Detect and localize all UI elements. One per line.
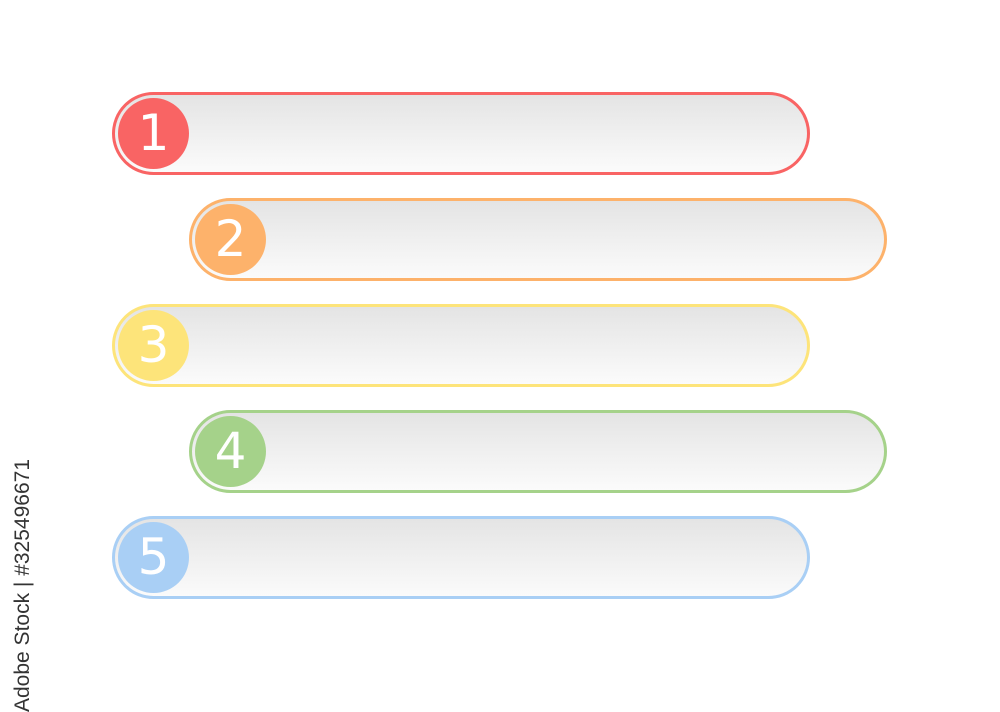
bar 2: [189, 198, 887, 281]
bar 3: [112, 304, 810, 387]
circle 1: [118, 98, 189, 169]
bar 4: [189, 410, 887, 493]
circle 3: [118, 310, 189, 381]
circle 3: 3: [138, 316, 169, 374]
circle 4: [195, 416, 266, 487]
circle 4: 4: [215, 422, 246, 480]
circle 1: 1: [138, 104, 169, 162]
circle 5: [118, 522, 189, 593]
bar 1: [112, 92, 810, 175]
bar 5: [112, 516, 810, 599]
circle 2: 2: [215, 210, 246, 268]
circle 2: [195, 204, 266, 275]
watermark text: Adobe Stock | #325496671: [11, 459, 34, 712]
circle 5: 5: [138, 528, 169, 586]
